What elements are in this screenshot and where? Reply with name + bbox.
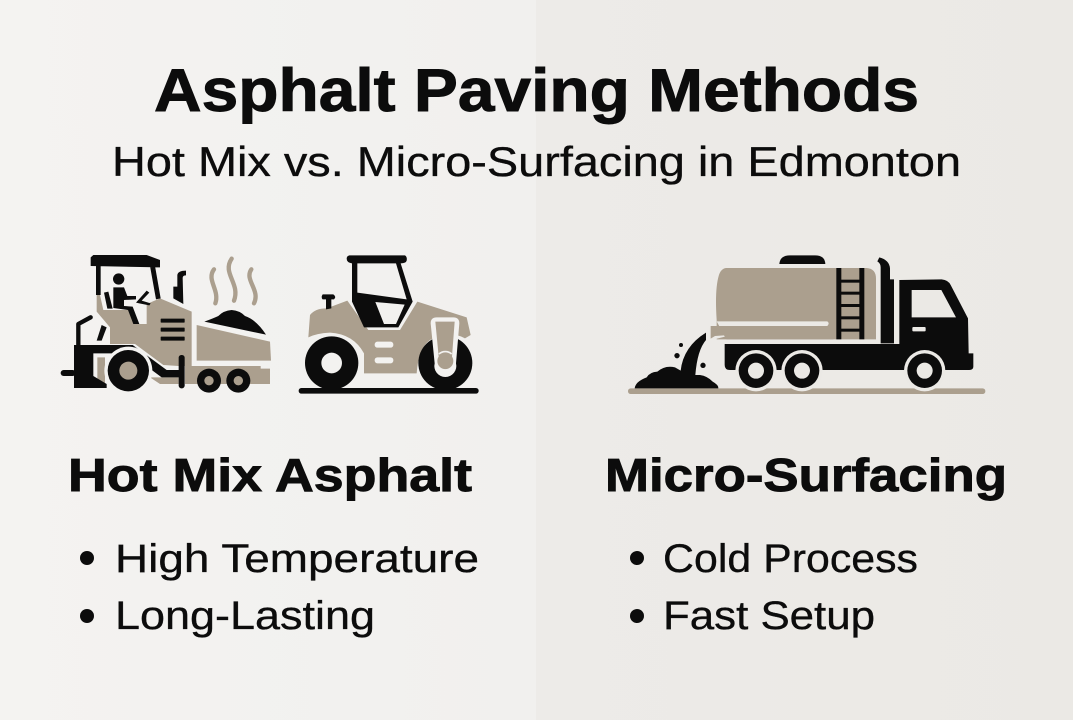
side strut bbox=[97, 325, 107, 341]
exhaust cap bbox=[322, 294, 335, 309]
chassis bbox=[725, 279, 973, 370]
paver body bbox=[97, 295, 192, 366]
cab window bbox=[912, 290, 956, 317]
paver hopper bbox=[197, 325, 271, 361]
window lights bbox=[375, 342, 393, 363]
icon: asphalt paver bbox=[61, 255, 271, 395]
rear wheel bbox=[305, 336, 358, 390]
exhaust stack bbox=[877, 257, 894, 343]
icon: micro-surfacing truck bbox=[628, 255, 985, 394]
list: micro-surfacing bullets: Cold Process bbox=[663, 537, 918, 581]
cab bbox=[347, 255, 413, 327]
exhaust stack bbox=[173, 271, 186, 304]
frame bbox=[74, 345, 179, 388]
front drum bbox=[418, 336, 472, 390]
vents bbox=[161, 319, 185, 341]
slurry pour and pile bbox=[635, 333, 718, 388]
heading: hot mix asphalt: Hot Mix Asphalt bbox=[68, 449, 472, 501]
droplets bbox=[674, 343, 706, 368]
list: hot mix bullets: Long-Lasting bbox=[115, 594, 375, 638]
wheels bbox=[735, 350, 945, 391]
panel: left background bbox=[0, 0, 536, 720]
tank hatch bbox=[779, 255, 825, 264]
drum fork bbox=[431, 317, 459, 377]
subtitle: Hot Mix vs. Micro-Surfacing in Edmonton bbox=[112, 138, 961, 185]
small wheels bbox=[197, 369, 221, 393]
icon: road roller bbox=[299, 255, 479, 394]
tank highlight line and spout bbox=[709, 321, 829, 339]
heading: micro-surfacing: Micro-Surfacing bbox=[605, 449, 1007, 501]
list: micro-surfacing bullets bbox=[630, 537, 918, 638]
steam bbox=[211, 259, 256, 303]
vertical screed bbox=[179, 355, 185, 388]
tank bbox=[716, 268, 876, 339]
canopy and posts bbox=[91, 255, 161, 299]
rear handrail bbox=[78, 317, 91, 346]
panel: right background bbox=[536, 0, 1073, 720]
main wheel bbox=[104, 347, 152, 395]
door handle bbox=[912, 327, 926, 331]
ladder bbox=[836, 268, 864, 339]
rear bar bbox=[61, 370, 76, 376]
ground line bbox=[628, 388, 985, 394]
ground line bbox=[299, 388, 479, 394]
asphalt mound bbox=[204, 310, 266, 335]
list: micro-surfacing bullets: Fast Setup bbox=[663, 594, 875, 638]
title: Asphalt Paving Methods bbox=[154, 57, 919, 124]
list: hot mix bullets: High Temperature bbox=[115, 537, 479, 581]
paver chassis bbox=[97, 357, 270, 384]
roller body bbox=[308, 301, 471, 373]
operator bbox=[104, 273, 151, 324]
list: hot mix bullets bbox=[80, 537, 479, 638]
